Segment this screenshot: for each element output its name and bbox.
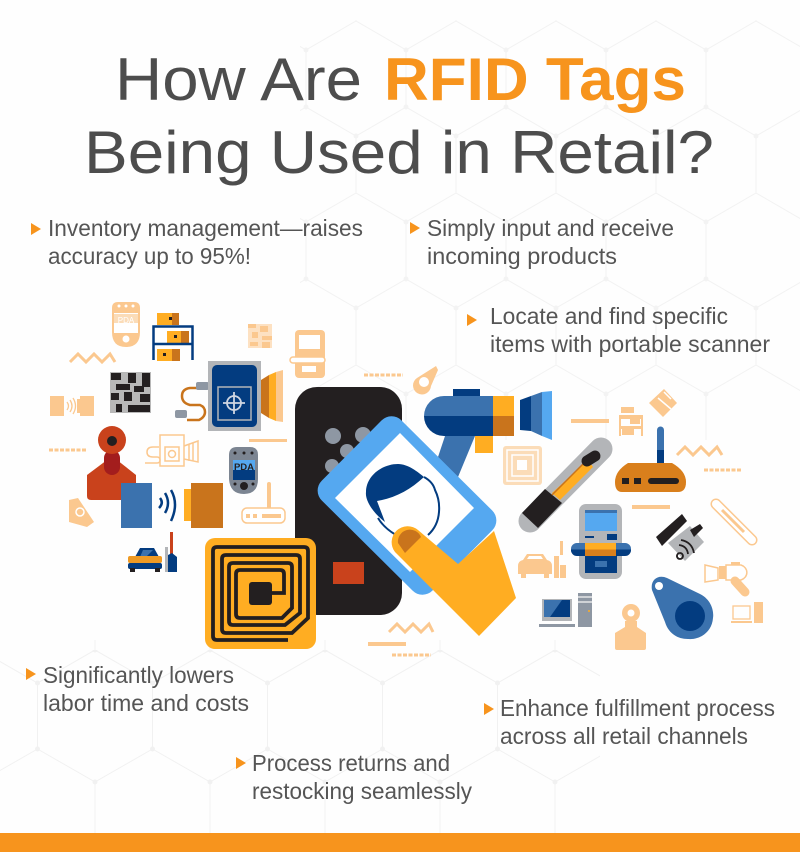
icon: light router <box>242 482 285 523</box>
decorative icon: dash bottom <box>368 642 406 646</box>
icon: light tag bottom <box>615 604 646 650</box>
text block: locate items: items with portable scanner <box>490 331 770 357</box>
decorative icon: zigzag bottom <box>389 624 433 632</box>
icon: hand pointing <box>392 526 516 636</box>
icon: car at barrier <box>128 532 177 572</box>
text block: input and receive <box>410 215 674 269</box>
text block: inventory management <box>31 215 363 269</box>
decorative icon: dots right <box>704 468 742 472</box>
icon: dark PDA <box>229 447 258 494</box>
icon: light shelf <box>619 407 643 436</box>
text block: locate items: Locate and find specific <box>490 303 728 329</box>
text block: fulfillment: across all retail channels <box>500 723 748 749</box>
text block: returns: Process returns and <box>252 750 450 776</box>
text block: returns: restocking seamlessly <box>252 778 472 804</box>
icon: dark PDA: PDA <box>234 462 254 473</box>
text block: inventory management: Inventory management—raises <box>48 215 363 241</box>
text block: input and receive: Simply input and receive <box>427 215 674 241</box>
icon: RFID pen tag <box>522 449 601 528</box>
decorative icon: dots bottom <box>392 654 431 656</box>
icon: light paper clip tag <box>716 504 752 540</box>
text block: locate items <box>467 303 770 357</box>
decorative icon: dotted line left <box>49 448 87 452</box>
icon: light scanning gun <box>705 562 747 592</box>
icon: light scanner <box>145 435 198 466</box>
icon: light PDA: PDA <box>118 316 135 325</box>
icon: smartphone with user face <box>312 410 502 601</box>
icon: blue and orange reader with waves <box>121 483 223 528</box>
icon: light rotated box <box>649 389 677 417</box>
icon: blue RFID scanner with cable <box>175 361 283 431</box>
icon: light key fob top <box>413 366 438 394</box>
icon: light RFID coil <box>503 446 542 485</box>
icon: blue key fob <box>652 577 713 639</box>
decorative icon: dash line left <box>249 439 287 442</box>
icon: laptop and tower <box>539 593 592 627</box>
icon: light QR code <box>248 324 272 348</box>
icon: light hand tag <box>69 498 94 527</box>
decorative icon: dash right <box>632 505 670 509</box>
decorative icon: dash right top <box>571 419 609 423</box>
icon: light PDA <box>112 302 140 347</box>
title: RFID Tags <box>384 46 686 113</box>
icon: orange router <box>615 426 686 492</box>
text block: labor costs: Significantly lowers <box>43 662 234 688</box>
icon: dark QR code <box>110 372 151 413</box>
icon: ticket kiosk <box>571 504 631 579</box>
text block: input and receive: incoming products <box>427 243 617 269</box>
icon: scanning gun <box>424 389 552 477</box>
decorative icon: zigzag right <box>677 447 722 455</box>
icon: shelf with boxes <box>154 313 192 361</box>
icon: wifi tag device <box>656 514 704 561</box>
decorative icon: dots top <box>364 374 403 376</box>
text block: fulfillment <box>484 695 775 749</box>
icon: light car <box>518 541 566 578</box>
icon: red tag <box>87 426 136 500</box>
icon: RFID chip <box>205 538 316 649</box>
text block: returns <box>236 750 472 804</box>
title <box>84 46 714 186</box>
title: Being Used in Retail? <box>84 119 714 186</box>
text block: inventory management: accuracy up to 95%! <box>48 243 251 269</box>
footer bar <box>0 833 800 852</box>
icon: light laptop and tower <box>731 602 763 623</box>
text block: fulfillment: Enhance fulfillment process <box>500 695 775 721</box>
text block: labor costs: labor time and costs <box>43 690 249 716</box>
text block: labor costs <box>26 662 249 716</box>
icon: light terminal <box>290 330 325 378</box>
icon: light wireless reader <box>50 396 94 416</box>
decorative icon: zigzag left <box>70 354 115 362</box>
title: How Are <box>115 46 362 113</box>
icon: black RFID reader <box>295 387 402 615</box>
